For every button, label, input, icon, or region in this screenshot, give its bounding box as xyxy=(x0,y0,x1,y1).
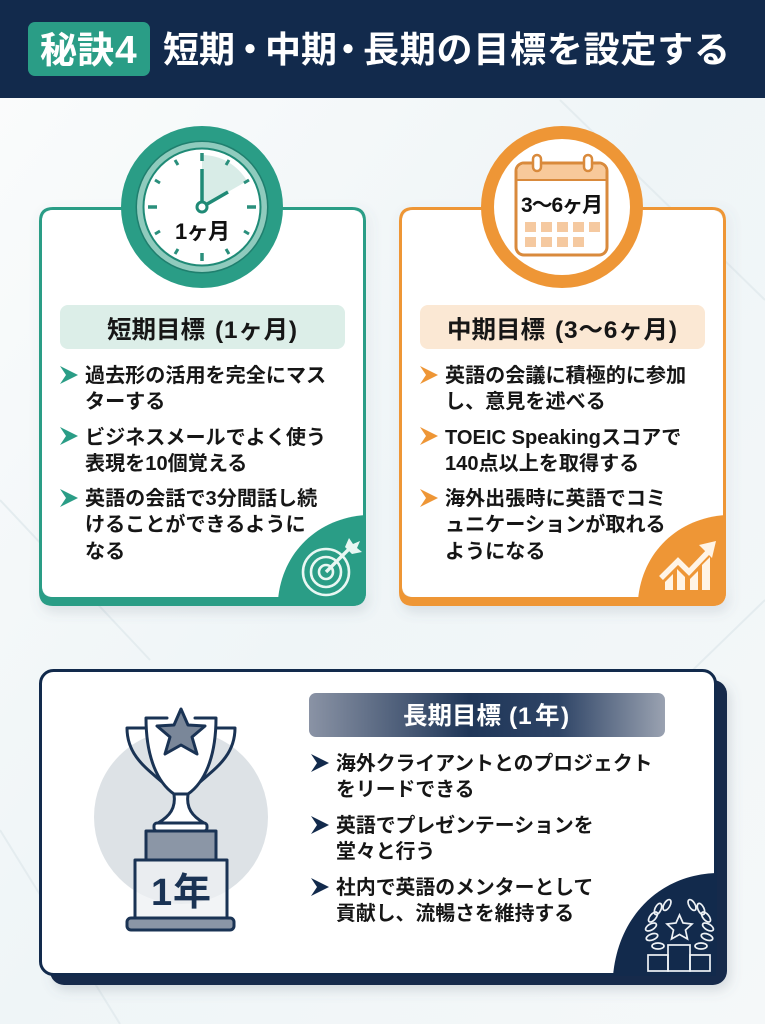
heading pill xyxy=(60,305,345,349)
title: 中期 xyxy=(265,29,337,70)
heading pill xyxy=(420,305,705,349)
bullet list: ターする xyxy=(85,390,165,413)
corner tab with laurel podium icon xyxy=(613,873,716,976)
panel: long-term goal xyxy=(40,670,727,985)
title: 長期の目標を設定する xyxy=(363,29,730,70)
bullet list xyxy=(420,364,686,563)
bullet list: 英語でプレゼンテーションを xyxy=(336,814,594,837)
badge: 秘訣4: 秘訣 xyxy=(40,30,114,71)
icon: trophy xyxy=(94,709,268,930)
card frame xyxy=(39,207,366,606)
bullet list: 英語の会話で3分間話し続 xyxy=(85,487,317,510)
title: ・ xyxy=(330,29,366,70)
badge: 秘訣4: 4 xyxy=(115,29,137,72)
bullet list xyxy=(311,753,653,925)
bullet list: 英語の会議に積極的に参加 xyxy=(445,364,686,387)
header band xyxy=(0,0,765,98)
bullet list: ビジネスメールでよく使う xyxy=(85,426,326,449)
heading pill: ) xyxy=(561,703,569,730)
icon: calendar xyxy=(481,126,643,288)
calendar label: 3〜6ヶ月 xyxy=(521,194,603,217)
trophy label: 1年 xyxy=(151,872,211,914)
bullet list: なる xyxy=(85,540,125,563)
corner tab with growth chart icon xyxy=(638,515,726,606)
heading pill: 1 xyxy=(518,703,532,730)
bullet list: 140点以上を取得する xyxy=(445,452,639,475)
icon: clock xyxy=(121,126,283,288)
offset shadow xyxy=(50,680,727,985)
bullet list: TOEIC Speakingスコアで xyxy=(445,427,681,449)
heading pill: (1ヶ月) xyxy=(215,317,297,344)
badge: 秘訣4 xyxy=(28,22,150,76)
bullet list: 社内で英語のメンターとして xyxy=(336,877,593,899)
panel: short-term goal xyxy=(39,207,366,606)
bullet list: 表現を10個覚える xyxy=(85,452,247,475)
bullet list: ュニケーションが取れる xyxy=(445,512,666,536)
clock label: 1ヶ月 xyxy=(175,219,230,244)
heading pill xyxy=(309,693,665,737)
heading pill: (3〜6ヶ月) xyxy=(555,317,677,344)
panel: mid-term goal xyxy=(399,207,726,606)
bullet list: 貢献し、流暢さを維持する xyxy=(336,902,574,925)
corner tab with target icon xyxy=(278,515,366,606)
bullet list: けることができるように xyxy=(85,512,306,536)
heading pill: 年 xyxy=(535,702,560,730)
title: 短期 xyxy=(163,29,235,70)
card frame xyxy=(399,207,726,606)
bullet list: し、意見を述べる xyxy=(445,390,606,413)
bullet list: 堂々と行う xyxy=(336,841,435,863)
heading pill: 短期目標 xyxy=(107,316,205,344)
bullet list: をリードできる xyxy=(336,779,475,801)
heading pill: ( xyxy=(509,703,518,730)
title: ・ xyxy=(232,29,268,70)
bullet list: 海外クライアントとのプロジェクト xyxy=(336,753,653,775)
card frame xyxy=(40,670,716,974)
bullet list xyxy=(60,364,326,563)
heading pill: 長期目標 xyxy=(403,702,501,730)
bullet list: ようになる xyxy=(445,540,545,563)
bullet list: 海外出張時に英語でコミ xyxy=(445,487,666,510)
bullet list: 過去形の活用を完全にマス xyxy=(85,364,326,387)
heading pill: 中期目標 xyxy=(447,316,545,344)
